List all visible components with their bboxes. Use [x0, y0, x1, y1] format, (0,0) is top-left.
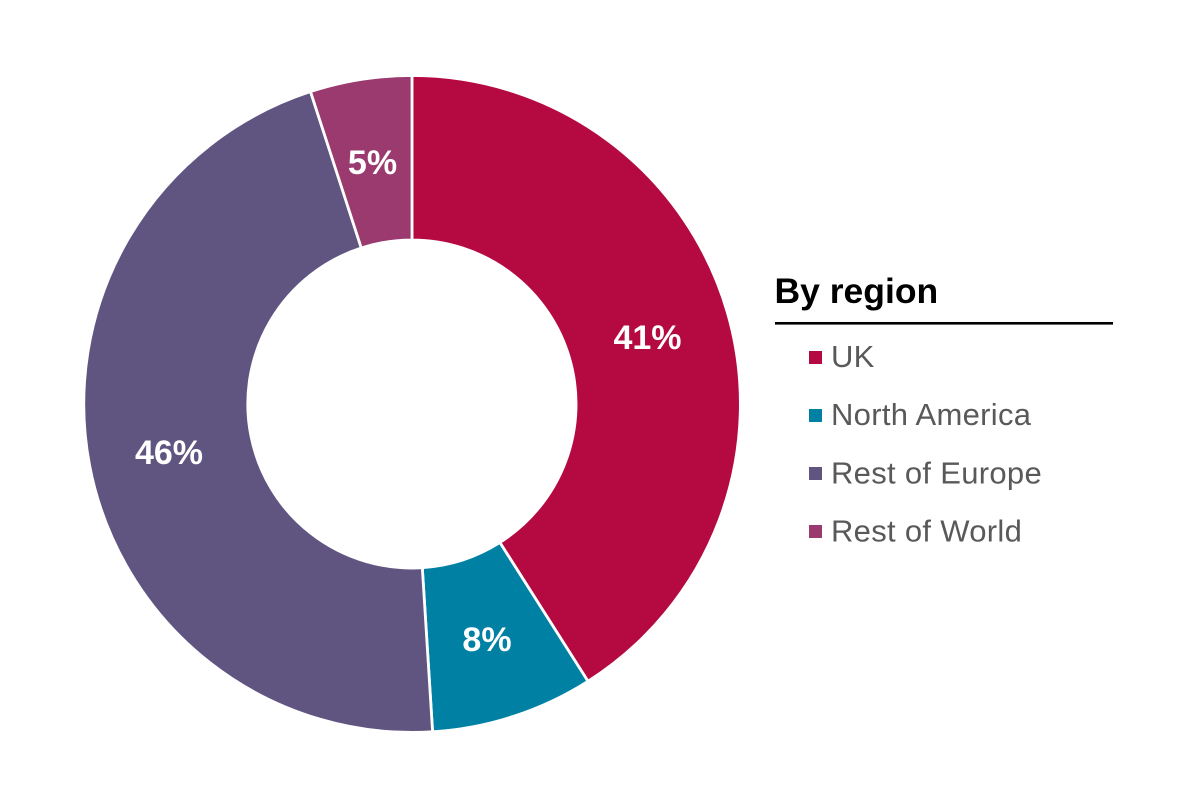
segment: UK 41%: [412, 76, 740, 681]
legend: [774, 271, 1113, 548]
segment: Rest of World 5%: [310, 76, 412, 248]
segment: North America 8%: [422, 542, 588, 732]
legend item: North America: North America: [831, 397, 1032, 432]
label: 41%: 41%: [613, 319, 682, 357]
label: 8%: 8%: [462, 621, 512, 659]
data labels: [135, 144, 682, 659]
label: 5%: 5%: [348, 144, 397, 182]
donut chart: [84, 76, 740, 732]
legend item: Rest of World: Rest of World: [831, 514, 1022, 548]
segment: Rest of Europe 46%: [84, 92, 433, 732]
legend heading: By region: [774, 271, 938, 311]
legend item: UK: UK: [831, 339, 875, 374]
legend rule: [775, 322, 1113, 325]
legend item: Rest of Europe: Rest of Europe: [831, 456, 1042, 490]
label: 46%: 46%: [135, 434, 203, 472]
legend item: UK: [809, 339, 875, 374]
